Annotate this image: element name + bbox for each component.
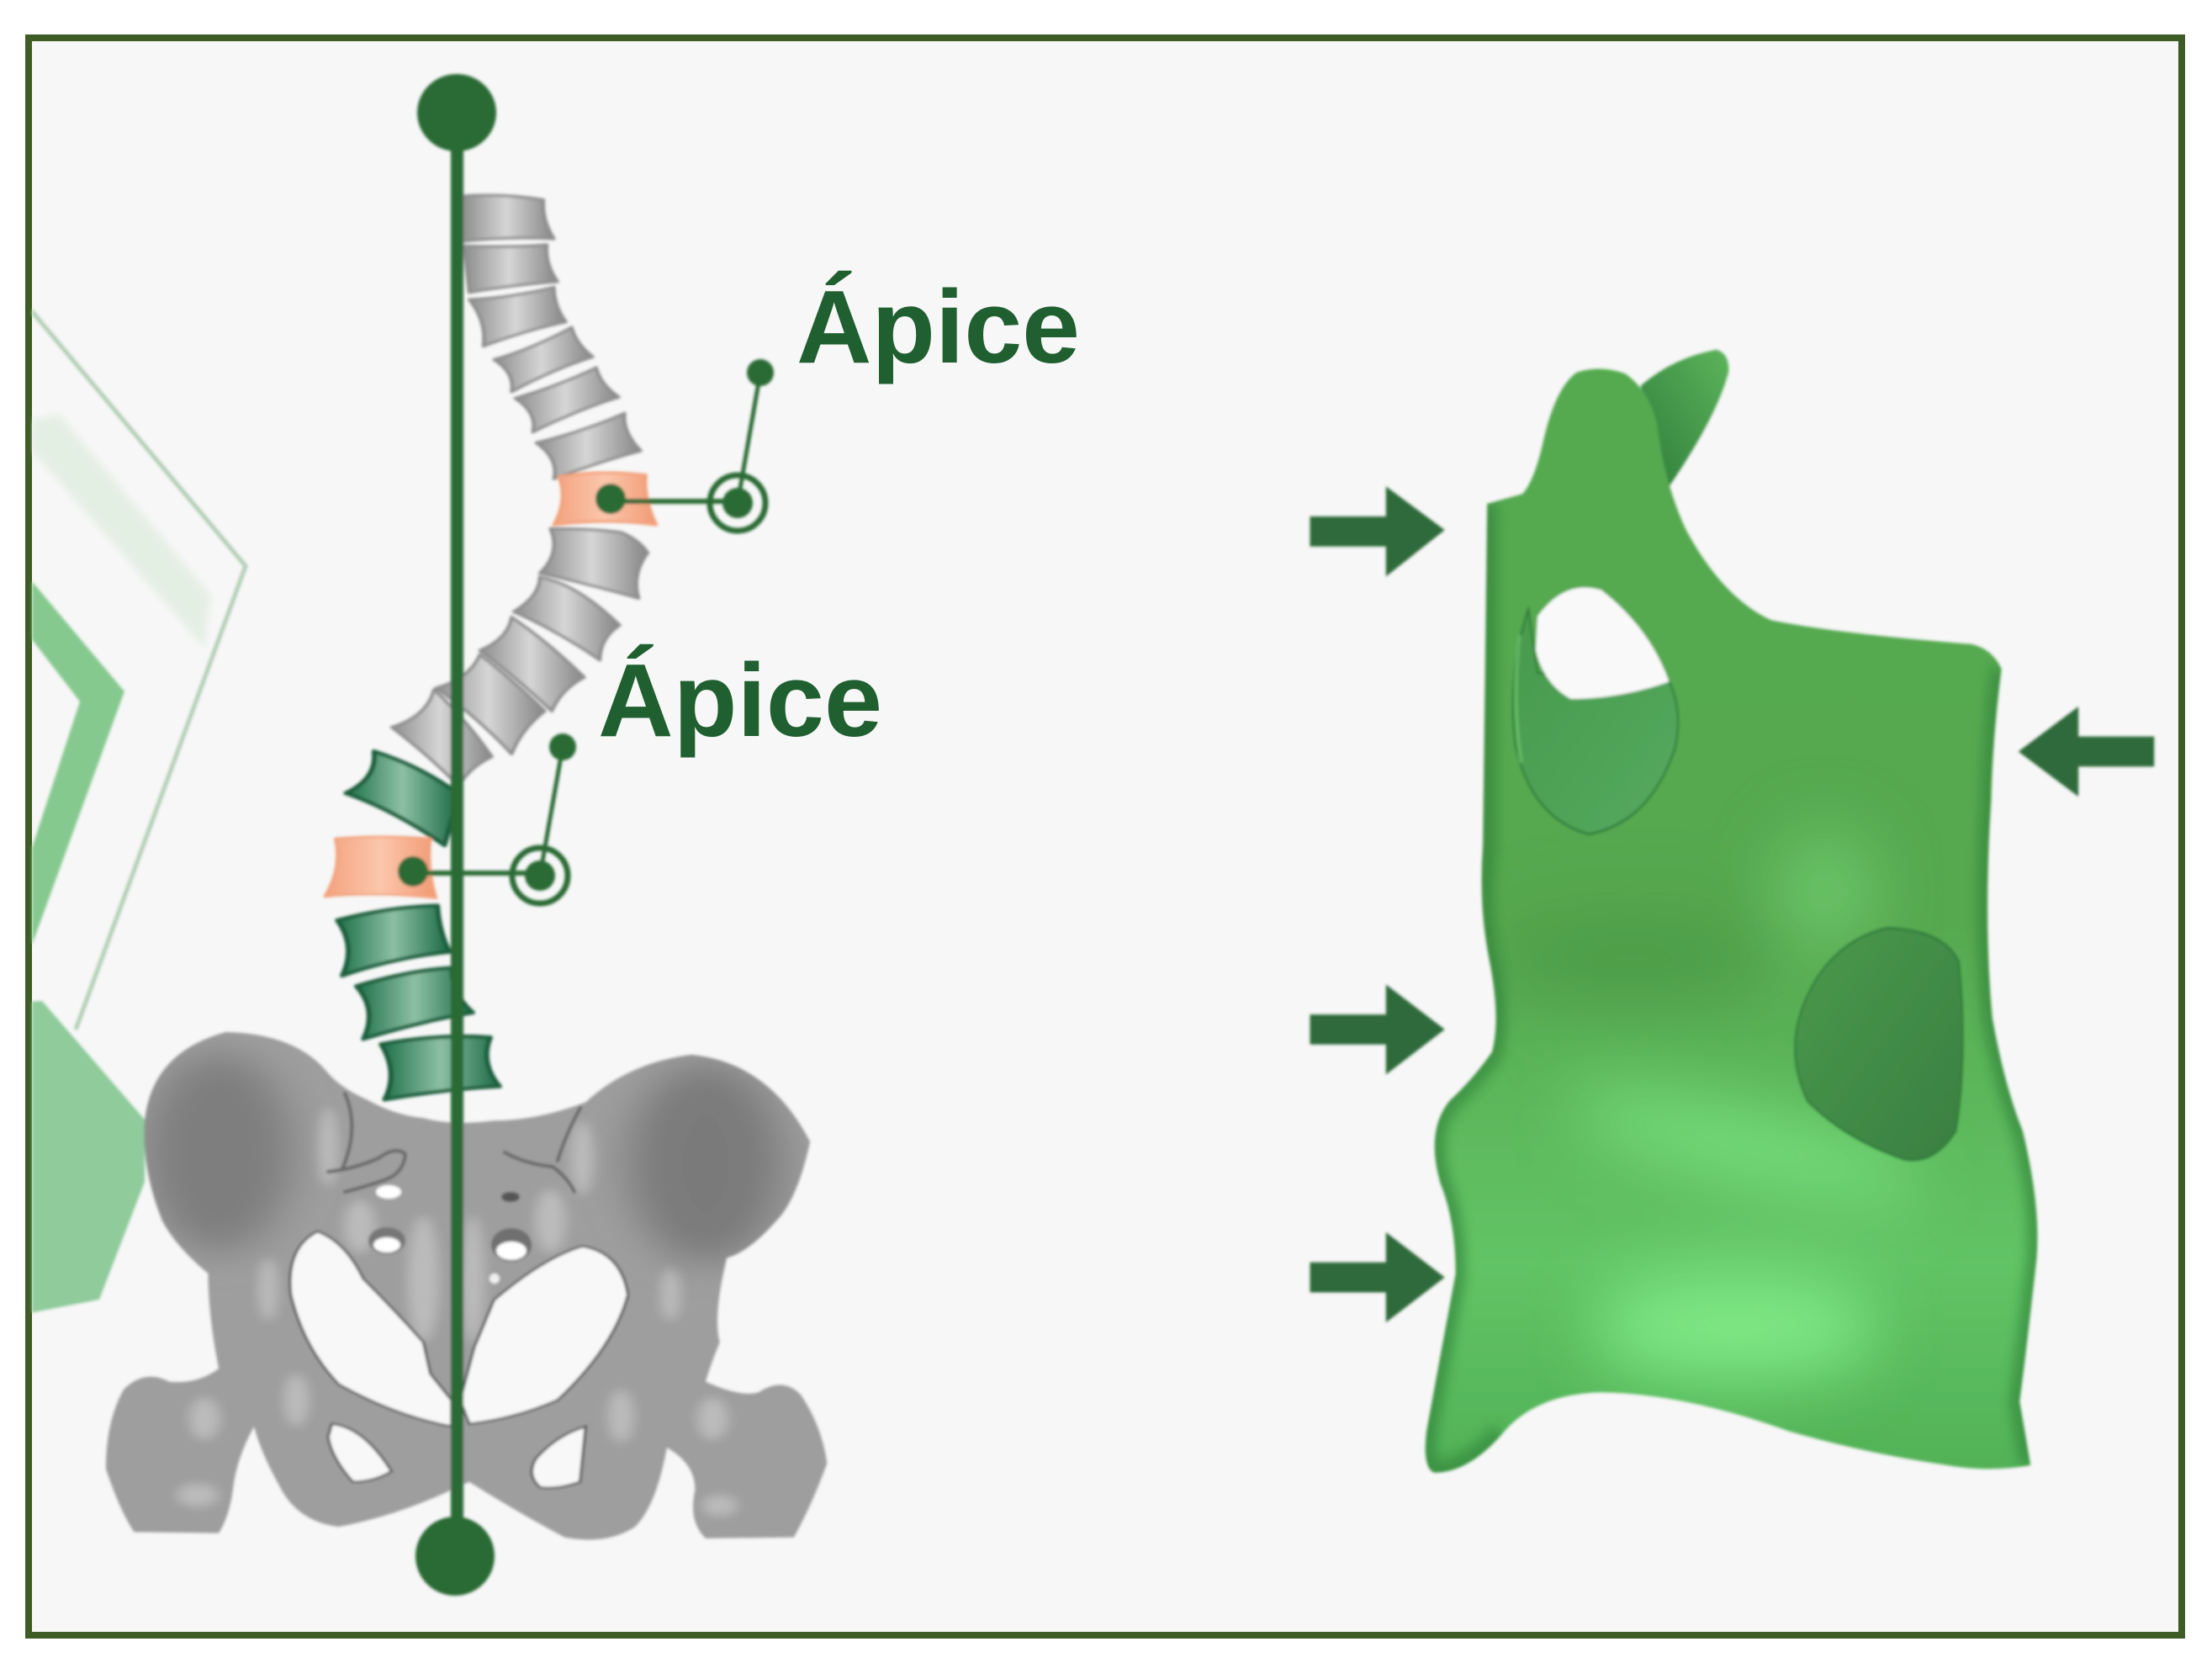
arrow: middle left — [1310, 984, 1445, 1074]
lower opening — [1795, 928, 1963, 1160]
arrow: right — [2019, 707, 2154, 797]
sacrum details — [328, 1093, 580, 1284]
arrow: lower left — [1310, 1232, 1445, 1322]
lumbar vertebrae: green — [337, 905, 500, 1099]
upper opening: inner wall — [1513, 609, 1678, 834]
bone highlights — [177, 1108, 738, 1517]
apex marker: upper — [595, 359, 774, 531]
left ilium shading — [145, 1052, 293, 1252]
pelvis — [92, 1020, 839, 1548]
arrows — [1310, 486, 2154, 1322]
label: lower apex: Ápice — [598, 643, 882, 759]
right ilium shading — [628, 1062, 783, 1263]
decorative background hexagons — [25, 310, 246, 1314]
apex vertebra: lower orange — [325, 837, 437, 898]
brace rear tab — [1641, 350, 1728, 486]
green brace model — [1310, 350, 2154, 1491]
sacral foramina — [376, 1185, 401, 1199]
pelvic openings — [290, 1231, 628, 1488]
lower vertebrae — [325, 837, 500, 1099]
upper opening: see-through — [1536, 587, 1670, 699]
apex marker: lower — [398, 733, 576, 903]
lower curve vertebra: green — [346, 751, 458, 845]
upper opening: rim highlight — [1516, 635, 1521, 763]
upper curve vertebrae: grey — [346, 195, 656, 845]
spine — [325, 195, 656, 1099]
vertical axis line — [415, 74, 496, 1596]
label: upper apex: Ápice — [796, 270, 1080, 385]
apex vertebra: upper orange — [554, 473, 656, 525]
sacroiliac ridges — [328, 1093, 580, 1192]
brace body — [1413, 350, 2050, 1491]
arrow: upper left — [1310, 486, 1445, 576]
